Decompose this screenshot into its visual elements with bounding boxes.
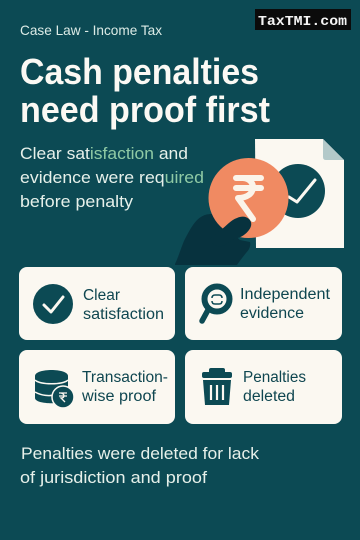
illustration: document, coin and hand <box>175 139 344 265</box>
card text: wise proof <box>81 388 157 405</box>
icon: database with coin <box>35 370 74 408</box>
title <box>20 51 270 130</box>
subtitle: before penalty <box>20 193 134 211</box>
title: Cash penalties <box>20 51 259 92</box>
card text: Transaction- <box>82 369 168 386</box>
watermark badge: TaxTMI.com <box>258 15 347 30</box>
conclusion text: Penalties were deleted for lack <box>21 445 260 463</box>
document fold <box>323 139 344 160</box>
card text: evidence <box>240 305 304 322</box>
category label: Case Law - Income Tax <box>20 22 162 38</box>
card text: satisfaction <box>83 306 164 323</box>
icon: rupee coin <box>208 158 288 238</box>
icon: trash can <box>202 368 232 405</box>
card: transaction-wise proof <box>19 350 175 424</box>
hand palm behind coin <box>175 214 250 265</box>
subtitle <box>20 145 204 211</box>
card text: deleted <box>243 388 295 405</box>
card text <box>81 369 168 405</box>
card: independent evidence <box>185 267 342 340</box>
card text: Penalties <box>243 369 306 386</box>
icon: check circle <box>33 284 73 324</box>
icon: magnifier <box>202 286 230 321</box>
card text: Independent <box>240 286 331 303</box>
title: need proof first <box>20 89 270 130</box>
subtitle: Clear satisfaction and <box>20 145 188 163</box>
card text <box>83 287 164 323</box>
hand finger over coin <box>208 217 251 246</box>
icon: document <box>255 139 344 248</box>
card text: Clear <box>83 287 120 304</box>
card text <box>240 286 331 322</box>
card: clear satisfaction <box>19 267 175 340</box>
subtitle: evidence were req uired <box>20 169 204 187</box>
card text <box>243 369 306 405</box>
icon: check badge <box>271 164 325 218</box>
card: penalties deleted <box>185 350 342 424</box>
conclusion text <box>20 445 260 487</box>
conclusion text: of jurisdiction and proof <box>20 469 207 487</box>
watermark badge <box>255 9 351 30</box>
